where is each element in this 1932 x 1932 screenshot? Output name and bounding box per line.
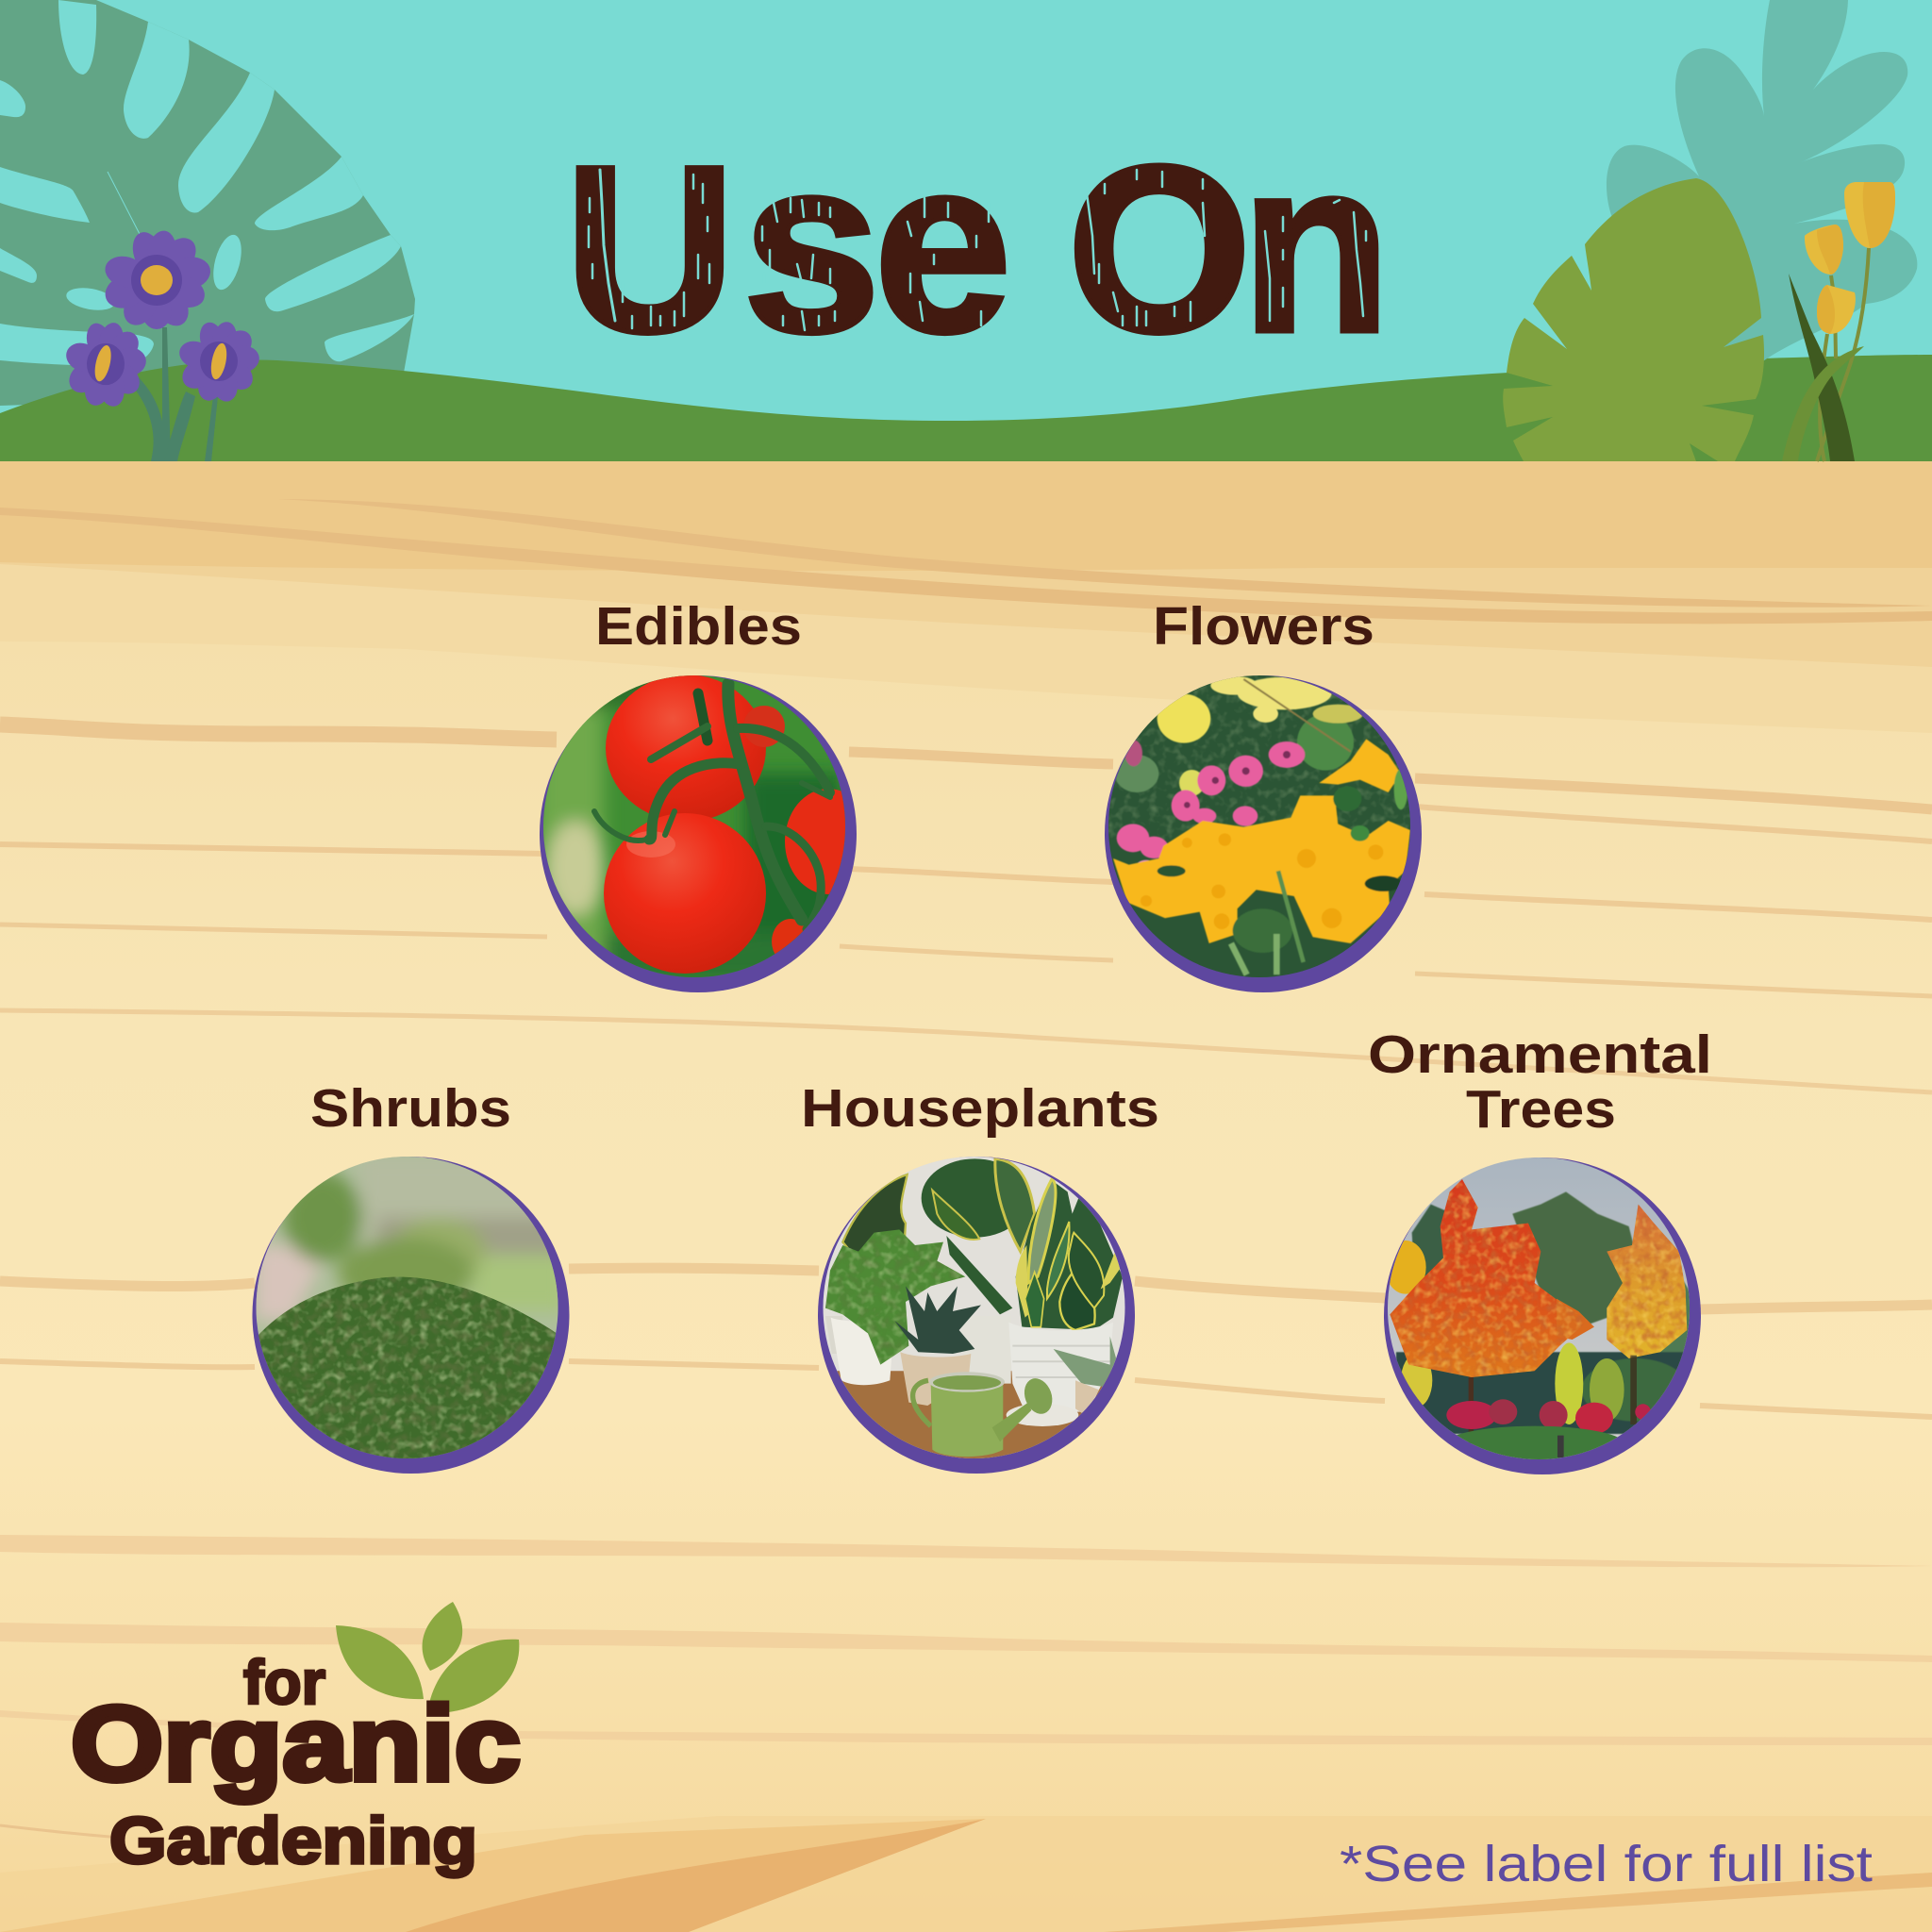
logo: for organic gardening xyxy=(71,1602,521,1877)
dark blade xyxy=(1789,274,1855,461)
logo text xyxy=(71,1647,521,1877)
orange maple xyxy=(1607,1205,1687,1358)
photo: tomatoes xyxy=(543,675,845,977)
item: shrubs xyxy=(250,1078,570,1474)
olive leaf xyxy=(1503,178,1764,461)
sky xyxy=(0,0,1932,461)
label: edibles: Edibles xyxy=(595,596,802,657)
basket pot xyxy=(900,1352,971,1406)
logo text: Gardening xyxy=(109,1804,477,1877)
logo text: for xyxy=(243,1647,325,1717)
title: U xyxy=(564,117,736,382)
label: houseplants: Houseplants xyxy=(801,1078,1159,1139)
ring: edibles xyxy=(540,675,857,992)
fern xyxy=(825,1229,966,1365)
label: ornamental trees xyxy=(1368,1024,1712,1140)
tulip stems xyxy=(1817,248,1869,461)
ring: houseplants xyxy=(818,1157,1135,1474)
title: e xyxy=(874,106,1012,384)
item: flowers xyxy=(1104,596,1422,992)
stems xyxy=(129,327,218,461)
logo leaves xyxy=(336,1602,519,1713)
ring: shrubs xyxy=(253,1157,570,1474)
back teal plant xyxy=(1607,0,1917,363)
table xyxy=(837,1371,1111,1458)
title: O xyxy=(1067,117,1252,382)
top flower xyxy=(101,228,213,332)
watering can xyxy=(913,1372,1057,1457)
aloe xyxy=(894,1286,981,1354)
right flower xyxy=(176,319,260,405)
olive blade xyxy=(1782,346,1864,461)
footnote: *See label for full list xyxy=(1340,1836,1873,1892)
title distress marks xyxy=(589,170,1366,330)
logo text: Organic xyxy=(71,1685,521,1803)
photo: autumn trees xyxy=(1382,1153,1695,1464)
label: flowers: Flowers xyxy=(1153,596,1374,657)
photo: flower bed xyxy=(1104,670,1415,981)
label: shrubs: Shrubs xyxy=(310,1078,511,1139)
title: s xyxy=(742,106,881,384)
wood background xyxy=(0,461,1932,1932)
label: ornamental trees: Trees xyxy=(1466,1079,1616,1140)
monstera leaf xyxy=(0,0,415,406)
item: houseplants xyxy=(801,1078,1159,1474)
left flower xyxy=(63,320,147,409)
ring: ornamental trees xyxy=(1384,1158,1701,1474)
ring: flowers xyxy=(1105,675,1422,992)
red maple xyxy=(1390,1179,1588,1377)
purple flowers xyxy=(63,228,260,461)
ground hills xyxy=(0,355,1932,461)
header scene xyxy=(0,0,1932,461)
small plant xyxy=(1054,1337,1118,1387)
photo: houseplants xyxy=(821,1151,1132,1465)
back pots xyxy=(969,1371,1011,1384)
item: edibles xyxy=(538,596,872,992)
label: ornamental trees: Ornamental xyxy=(1368,1024,1712,1085)
photo: hedge xyxy=(257,1157,558,1458)
title: n xyxy=(1241,108,1391,384)
yellow flower mass xyxy=(1113,795,1410,943)
foliage xyxy=(842,1158,1123,1330)
item: ornamental trees xyxy=(1368,1024,1712,1474)
title xyxy=(564,106,1391,384)
yellow tulips xyxy=(1782,182,1895,461)
